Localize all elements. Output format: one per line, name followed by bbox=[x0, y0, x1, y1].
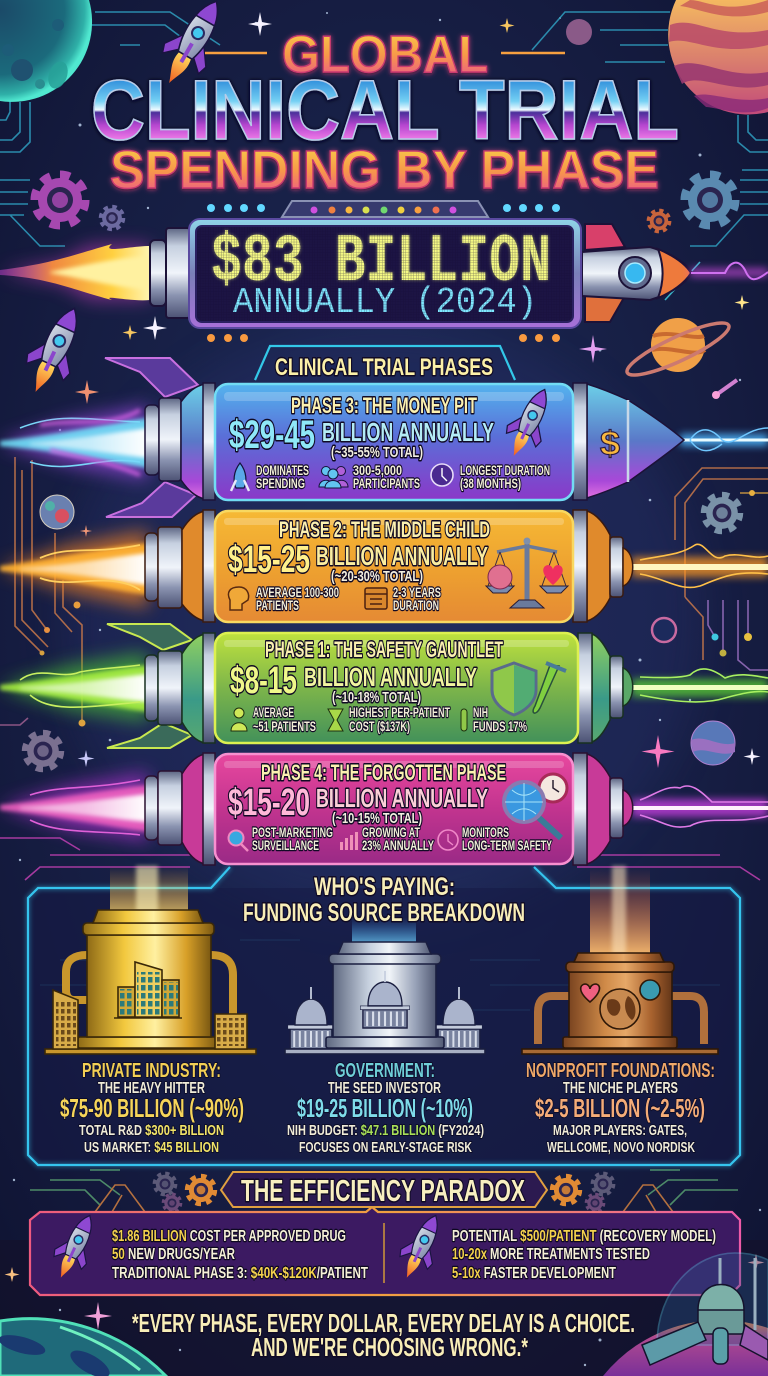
phase 4 text bbox=[228, 760, 506, 827]
phase 2 calendar icon bbox=[365, 588, 387, 609]
funding: government text: $19-25 BILLION (~10%) bbox=[297, 1093, 473, 1123]
phase 2 scales icon bbox=[486, 538, 568, 608]
funding: private industry text: US MARKET: $45 BILLION bbox=[84, 1140, 219, 1156]
planet: teal moon top-left bbox=[0, 0, 92, 102]
funding: government text: GOVERNMENT: bbox=[335, 1060, 435, 1082]
phase 2 text: $15-25 bbox=[228, 539, 310, 581]
section heading: who's paying: WHO'S PAYING: bbox=[314, 873, 455, 901]
phase 3 stat: duration bbox=[460, 463, 550, 491]
phase 3 dollar sign: $ bbox=[600, 425, 620, 463]
phase 4 stat: growth bbox=[362, 825, 434, 853]
closing quote bbox=[132, 1308, 635, 1362]
phase 1 text: PHASE 1: THE SAFETY GAUNTLET bbox=[265, 637, 503, 662]
circuit node dots bbox=[40, 490, 755, 726]
headline figure: $83 BILLION bbox=[211, 224, 551, 301]
phase 1 body bbox=[215, 633, 578, 743]
left column stats: $1.86 BILLION COST PER APPROVED DRUG bbox=[112, 1228, 346, 1245]
rocket: efficiency right bbox=[391, 1208, 451, 1285]
phase 1 wings bbox=[107, 624, 192, 748]
phase 3 tail bbox=[145, 383, 215, 500]
title: GLOBAL bbox=[282, 26, 488, 84]
phase 1 vial icon bbox=[461, 709, 467, 731]
phase 1 text bbox=[230, 637, 503, 706]
panel: phase 1 capsule bbox=[0, 624, 768, 748]
phase 2 nose bbox=[573, 510, 633, 622]
funding: private industry text: $75-90 BILLION (~90%) bbox=[60, 1093, 244, 1123]
section heading: who's paying bbox=[243, 873, 525, 927]
phase 3 body bbox=[215, 384, 573, 500]
billboard: rocket nose and fins bbox=[582, 224, 768, 322]
small planet top-right bbox=[566, 19, 592, 45]
phase 2 stat: patients: PATIENTS bbox=[256, 598, 299, 613]
phase 1 stat: patients: AVERAGE bbox=[253, 705, 294, 720]
closing quote: AND WE'RE CHOOSING WRONG.* bbox=[251, 1332, 529, 1362]
rocket: efficiency left bbox=[45, 1208, 105, 1285]
phase 4 stat: monitors bbox=[462, 825, 552, 853]
flame exhaust: left of billboard bbox=[0, 244, 150, 300]
phase 4 nose bbox=[573, 753, 633, 865]
phase 4 text: PHASE 4: THE FORGOTTEN PHASE bbox=[261, 760, 506, 785]
phase 3 text: PHASE 3: THE MONEY PIT bbox=[291, 393, 477, 418]
phase 3 nose bbox=[573, 383, 684, 500]
phase 2 stat: duration: 2-3 YEARS bbox=[393, 585, 441, 600]
title: CLINICAL TRIAL bbox=[91, 63, 679, 157]
phase 1 stat: patients: ~51 PATIENTS bbox=[253, 719, 316, 734]
phase 3 stat: participants: PARTICIPANTS bbox=[353, 476, 420, 491]
phase 4 stat: surveillance: SURVEILLANCE bbox=[252, 838, 319, 853]
phase 1 shield icon bbox=[492, 663, 536, 715]
panel: phase 2 capsule bbox=[0, 510, 768, 622]
billboard: left cap bbox=[150, 228, 190, 318]
phase 2 text: (~20-30% TOTAL) bbox=[331, 568, 423, 585]
panel: phase 3 rocket capsule bbox=[0, 358, 768, 517]
phase 1 text: BILLION ANNUALLY bbox=[304, 662, 477, 692]
phase 1 tail bbox=[145, 633, 215, 743]
left column stats: TRADITIONAL PHASE 3: $40K-$120K/PATIENT bbox=[112, 1265, 368, 1282]
billboard: display screen bbox=[189, 219, 581, 328]
phase 4 stat: growth: GROWING AT bbox=[362, 825, 420, 840]
tank: nonprofit copper bbox=[522, 953, 718, 1054]
phase 3 text: BILLION ANNUALLY bbox=[322, 417, 494, 447]
phase 2 head icon bbox=[228, 587, 249, 610]
panel: funding sources frame bbox=[28, 867, 740, 1165]
phase 3 stat: dominates: SPENDING bbox=[256, 476, 305, 491]
phase 3 stat: participants bbox=[353, 463, 420, 491]
phase 3 rocket stat icon bbox=[231, 463, 249, 491]
phase 2 text: BILLION ANNUALLY bbox=[316, 541, 488, 571]
heading: the efficiency paradox bbox=[221, 1172, 547, 1208]
left column stats bbox=[112, 1228, 368, 1282]
phase 4 clock icon bbox=[438, 830, 458, 850]
phase 1 nose bbox=[578, 633, 633, 743]
phase 2 stat: duration bbox=[393, 585, 441, 613]
phase 2 exhaust beams bbox=[0, 530, 768, 608]
funding: government text: THE SEED INVESTOR bbox=[328, 1080, 441, 1097]
section heading: who's paying: FUNDING SOURCE BREAKDOWN bbox=[243, 899, 525, 927]
phase 3 rocket icon bbox=[497, 382, 562, 464]
phase 3 stat: dominates: DOMINATES bbox=[256, 463, 309, 478]
phase 1 stat: cost: HIGHEST PER-PATIENT bbox=[349, 705, 450, 720]
phase 3 text bbox=[229, 393, 494, 461]
phase 1 text: $8-15 bbox=[230, 660, 297, 702]
planet: bottom-left bbox=[0, 1319, 166, 1376]
phase 1 glass highlight bbox=[224, 640, 569, 647]
energy beams above tanks bbox=[110, 866, 650, 956]
phase 2 stat: duration: DURATION bbox=[393, 598, 439, 613]
phase 4 tail bbox=[145, 753, 215, 865]
planet: bottom-right with station bbox=[603, 1253, 768, 1376]
planet: banded gas giant top-right bbox=[668, 0, 768, 114]
phase 4 stat: surveillance bbox=[252, 825, 333, 853]
phase 1 exhaust beams bbox=[0, 652, 768, 722]
funding: private industry text: THE HEAVY HITTER bbox=[98, 1080, 205, 1097]
rocket: mid left bbox=[14, 299, 96, 402]
phase 1 stat: cost bbox=[349, 705, 450, 734]
phase 4 text: BILLION ANNUALLY bbox=[316, 783, 488, 813]
planet: small multicolour left bbox=[40, 495, 74, 529]
phase 3 text: $29-45 bbox=[229, 413, 315, 457]
panel: phase 4 capsule bbox=[0, 753, 768, 865]
phase 4 stat: monitors: MONITORS bbox=[462, 825, 509, 840]
phase 1 stat: NIH bbox=[473, 705, 527, 734]
funding: government text: NIH BUDGET: $47.1 BILLION (FY2024) bbox=[287, 1123, 484, 1139]
right column stats: 5-10x FASTER DEVELOPMENT bbox=[452, 1265, 616, 1282]
phase 3 stat: duration: LONGEST DURATION bbox=[460, 463, 550, 478]
phase 3 stat: dominates bbox=[256, 463, 309, 491]
right column stats: 10-20x MORE TREATMENTS TESTED bbox=[452, 1246, 650, 1263]
headline subtitle: ANNUALLY (2024) bbox=[233, 282, 537, 323]
phase 1 stat: cost: COST ($137K) bbox=[349, 719, 410, 734]
phase 4 body bbox=[215, 754, 573, 864]
phase 1 text: (~10-18% TOTAL) bbox=[332, 689, 421, 706]
funding: nonprofit text: WELLCOME, NOVO NORDISK bbox=[547, 1140, 695, 1156]
billboard: top LED panel bbox=[207, 201, 560, 342]
gears: header bbox=[35, 175, 735, 232]
funding: nonprofit text: MAJOR PLAYERS: GATES, bbox=[553, 1123, 687, 1139]
phase 3 stat: participants: 300-5,000 bbox=[353, 463, 402, 478]
phase 1 stat: NIH: FUNDS 17% bbox=[473, 719, 527, 734]
phase 4 exhaust beams bbox=[0, 772, 768, 842]
phase 2 text bbox=[228, 517, 490, 585]
phase 2 stat: patients: AVERAGE 100-300 bbox=[256, 585, 339, 600]
phase 3 stat: duration: (38 MONTHS) bbox=[460, 476, 521, 491]
phase 4 stat: surveillance: POST-MARKETING bbox=[252, 825, 333, 840]
tank: private industry gold bbox=[45, 910, 256, 1054]
phase 2 body bbox=[215, 511, 573, 622]
funding: nonprofit text bbox=[526, 1060, 715, 1156]
phase 4 glass highlight bbox=[224, 761, 564, 768]
right column stats bbox=[452, 1228, 716, 1282]
section heading: clinical trial phases: CLINICAL TRIAL PHASES bbox=[275, 354, 493, 381]
heading: the efficiency paradox: THE EFFICIENCY PARADOX bbox=[241, 1173, 525, 1208]
planets and gears: mid sides bbox=[25, 495, 740, 769]
section heading: clinical trial phases bbox=[255, 346, 515, 381]
left column stats: 50 NEW DRUGS/YEAR bbox=[112, 1246, 235, 1263]
phase 4 magnifier stat icon bbox=[228, 830, 248, 851]
funding: government text bbox=[287, 1060, 484, 1156]
right column stats: POTENTIAL $500/PATIENT (RECOVERY MODEL) bbox=[452, 1228, 716, 1245]
phase 3 people icon bbox=[319, 466, 348, 488]
divider bbox=[383, 1223, 385, 1283]
phase 4 stat: growth: 23% ANNUALLY bbox=[362, 838, 434, 853]
phase 2 stat: patients bbox=[256, 585, 339, 613]
phase 3 clock icon bbox=[431, 464, 453, 486]
phase 4 text: (~10-15% TOTAL) bbox=[332, 810, 422, 827]
phase 2 glass highlight bbox=[224, 518, 564, 525]
phase 3 wings bbox=[105, 358, 198, 517]
phase 2 tail bbox=[145, 510, 215, 622]
planet: saturn bbox=[622, 314, 734, 384]
phase 4 magnifier and clock icon bbox=[504, 774, 567, 838]
funding: private industry text bbox=[60, 1060, 244, 1156]
gears: efficiency heading bbox=[154, 1174, 614, 1212]
title bbox=[91, 26, 679, 200]
phase 3 glass highlight bbox=[224, 392, 564, 401]
funding: private industry text: PRIVATE INDUSTRY: bbox=[82, 1060, 221, 1082]
phase 3 exhaust beams bbox=[0, 405, 768, 480]
phase 4 growth chart icon bbox=[340, 832, 358, 850]
funding: government text: FOCUSES ON EARLY-STAGE RISK bbox=[299, 1140, 472, 1156]
phase 1 stat: NIH: NIH bbox=[473, 705, 488, 720]
phase 1 test tube icon bbox=[533, 663, 566, 713]
phase 4 text: $15-20 bbox=[228, 782, 310, 824]
phase 3 text: (~35-55% TOTAL) bbox=[331, 444, 423, 461]
comet streak right bbox=[712, 380, 737, 399]
phase 4 stat: monitors: LONG-TERM SAFETY bbox=[462, 838, 552, 853]
phase 1 hourglass icon bbox=[328, 709, 343, 731]
funding: nonprofit text: THE NICHE PLAYERS bbox=[563, 1080, 678, 1097]
funding: private industry text: TOTAL R&D $300+ BILLION bbox=[79, 1123, 224, 1139]
title: SPENDING BY PHASE bbox=[110, 140, 659, 200]
phase 1 stat: patients bbox=[253, 705, 316, 734]
flare lines beside title bbox=[205, 52, 565, 54]
panel: efficiency paradox bbox=[30, 1207, 740, 1295]
phase 1 volunteer icon bbox=[231, 708, 247, 731]
tank: government silver bbox=[285, 942, 485, 1054]
phase 2 text: PHASE 2: THE MIDDLE CHILD bbox=[279, 517, 490, 542]
rocket: top bbox=[148, 0, 237, 95]
